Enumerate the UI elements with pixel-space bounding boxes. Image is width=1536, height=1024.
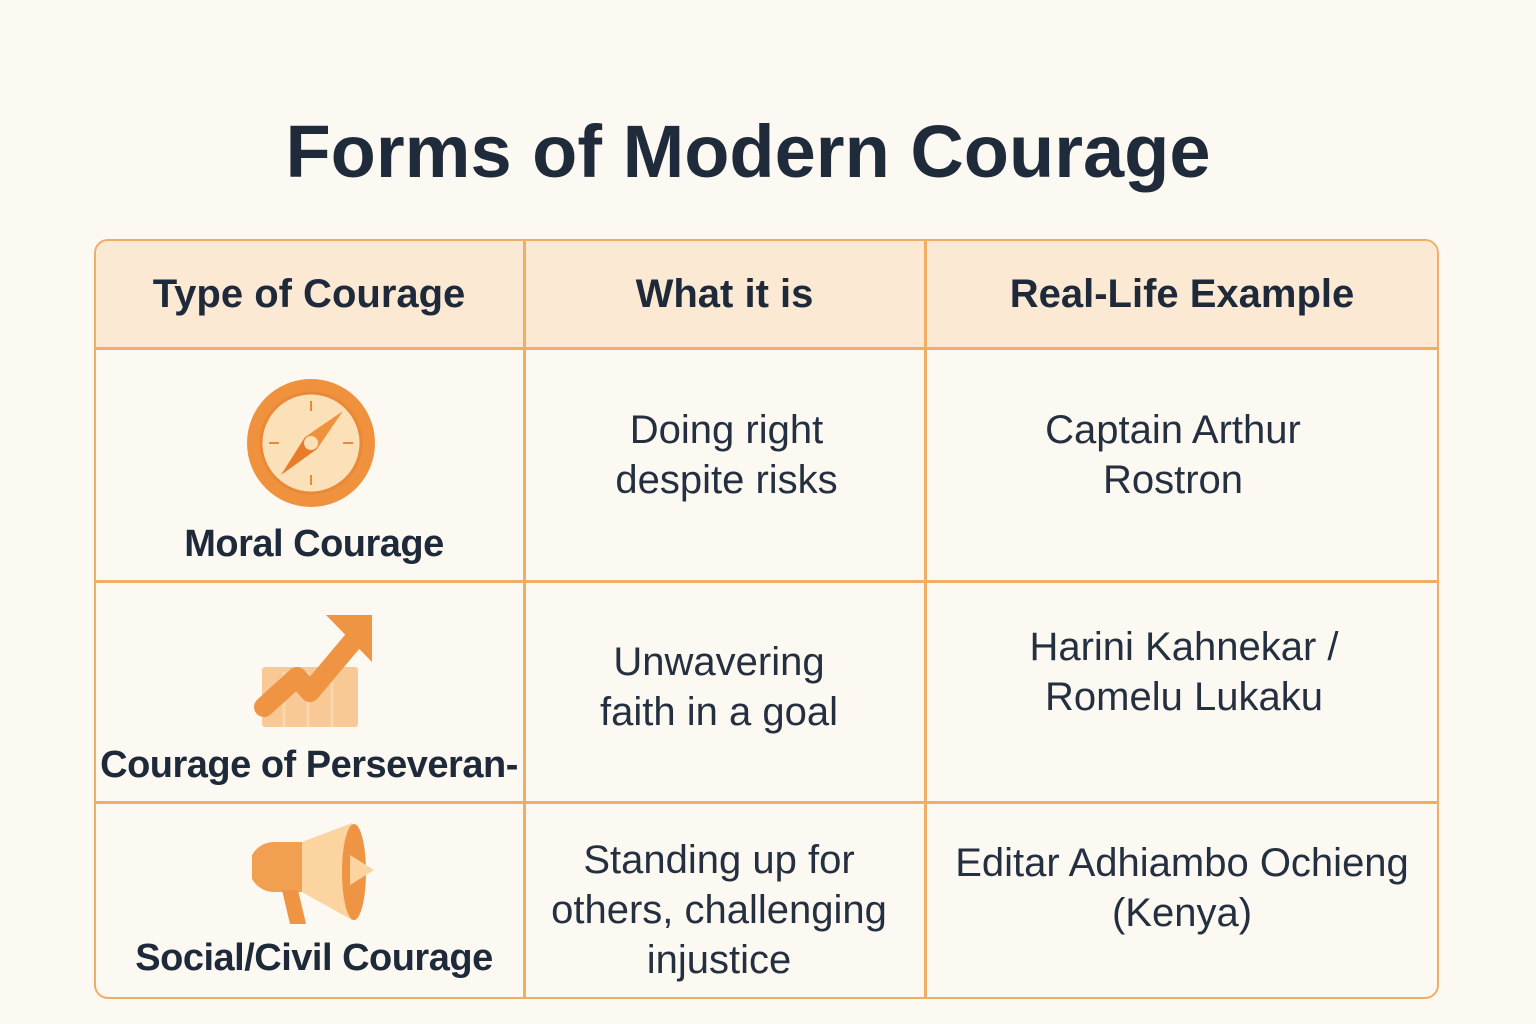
row3 what: others, challenging bbox=[551, 888, 887, 932]
row1 what: Doing right bbox=[630, 408, 823, 452]
icon: chart arrow bbox=[254, 615, 372, 727]
header: what: What it is bbox=[636, 272, 813, 316]
header: example: Real-Life Example bbox=[1010, 272, 1354, 316]
header: type: Type of Courage bbox=[153, 272, 465, 316]
icon: compass bbox=[247, 379, 375, 507]
row2 example bbox=[1029, 625, 1339, 719]
row1 what: despite risks bbox=[615, 458, 838, 502]
table bbox=[94, 239, 1439, 999]
row3 example: (Kenya) bbox=[1112, 891, 1252, 935]
label: moral: Moral Courage bbox=[184, 523, 444, 565]
label: social: Social/Civil Courage bbox=[135, 937, 493, 979]
row1 example: Rostron bbox=[1103, 458, 1243, 502]
row2 example: Romelu Lukaku bbox=[1045, 675, 1323, 719]
row2 what: faith in a goal bbox=[600, 690, 838, 734]
row2 example: Harini Kahnekar / bbox=[1029, 625, 1339, 669]
row1 example: Captain Arthur bbox=[1045, 408, 1301, 452]
row2 what bbox=[600, 640, 838, 734]
row3 what bbox=[551, 838, 887, 982]
icon: megaphone bbox=[252, 823, 374, 924]
row1 what bbox=[615, 408, 838, 502]
label: perseverance: Courage of Perseveran- bbox=[100, 744, 518, 786]
row3 example bbox=[955, 841, 1409, 935]
row2 what: Unwavering bbox=[613, 640, 825, 684]
header row bbox=[96, 241, 1441, 349]
row3 what: injustice bbox=[647, 938, 791, 982]
row3 what: Standing up for bbox=[583, 838, 855, 882]
row1 example bbox=[1045, 408, 1301, 502]
title: Forms of Modern Courage bbox=[285, 110, 1211, 193]
row3 example: Editar Adhiambo Ochieng bbox=[955, 841, 1409, 885]
